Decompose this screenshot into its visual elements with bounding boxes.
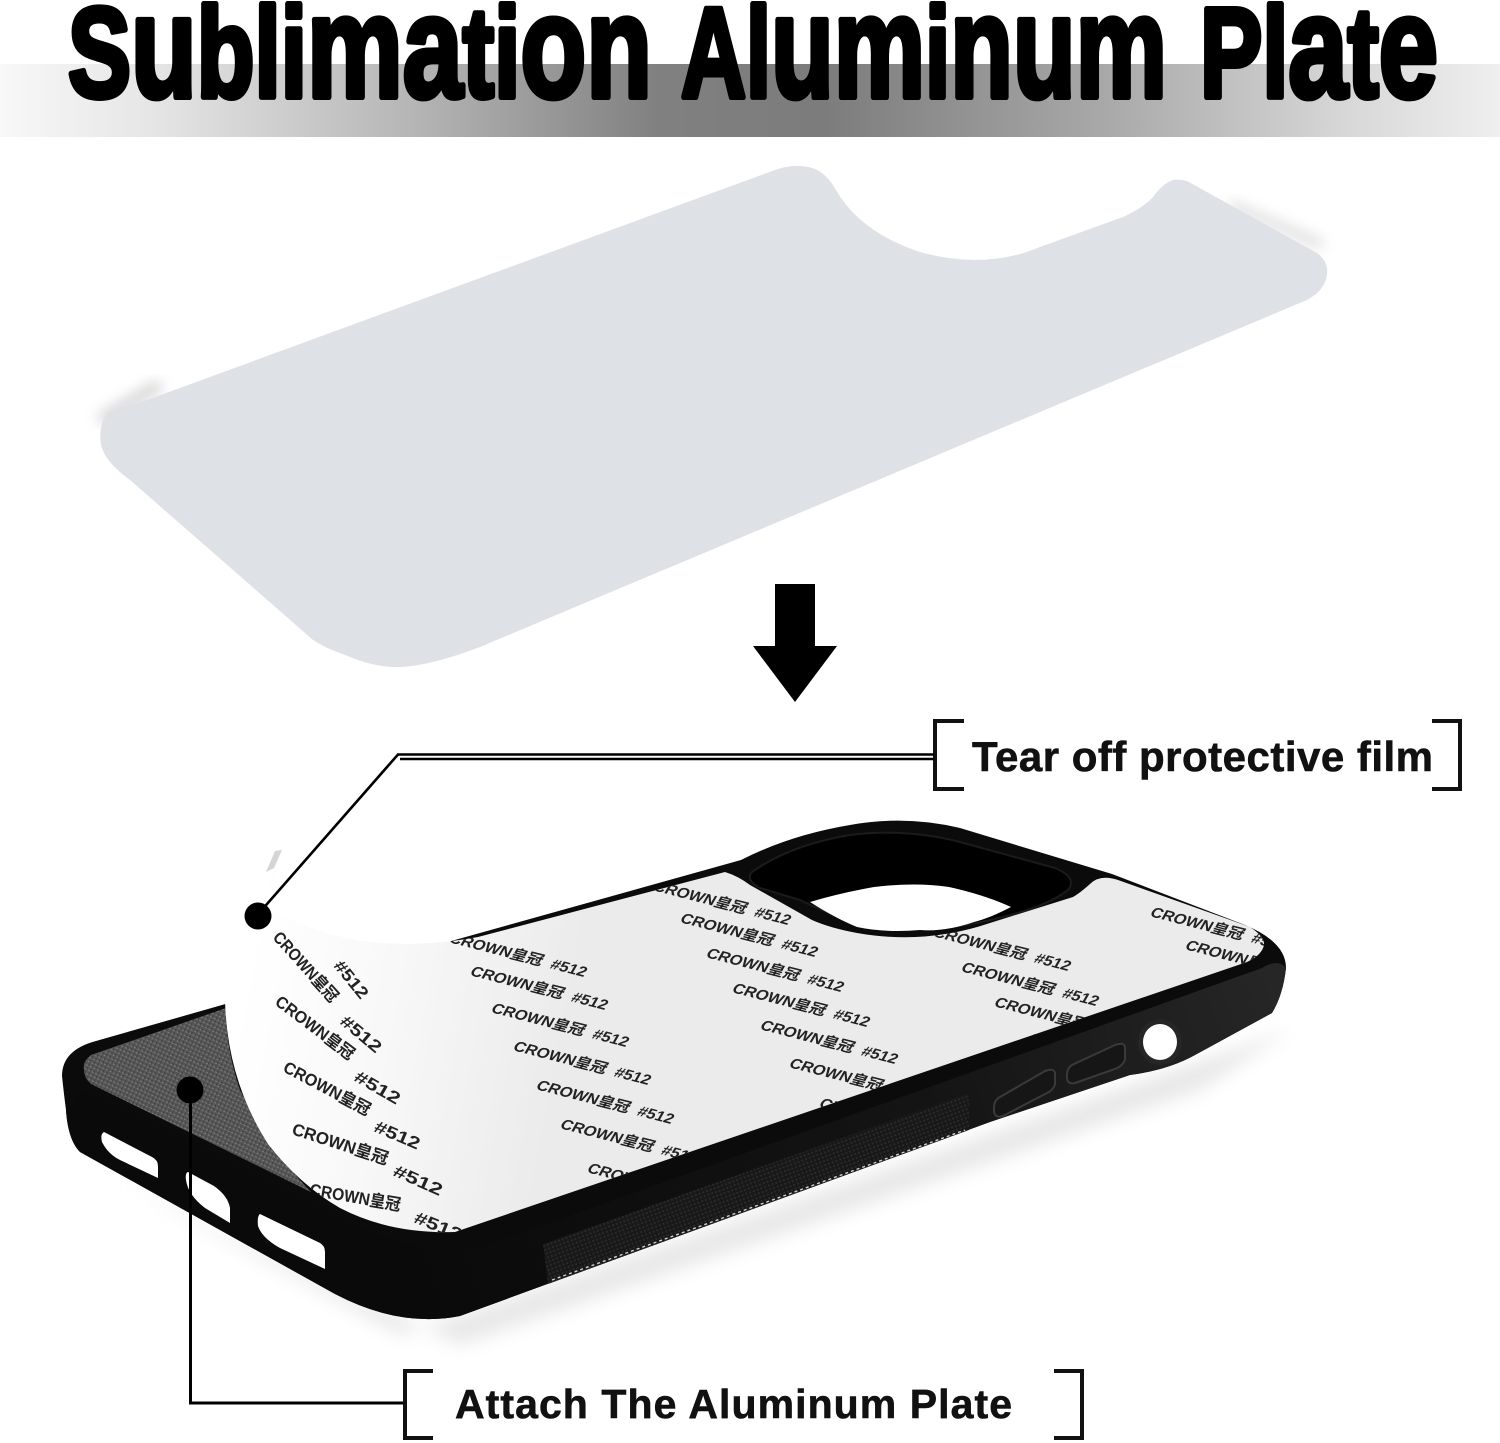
fabric backing xyxy=(84,1008,311,1192)
print: CROWN #512 rows: CROWN皇冠 #512 xyxy=(557,1116,702,1166)
port openings xyxy=(101,1132,325,1269)
print: CROWN #512 rows: CROWN皇冠 #512 xyxy=(1182,937,1327,987)
print: CROWN #512 rows: #512 xyxy=(351,1067,404,1108)
callout: tear off protective film xyxy=(935,721,1460,789)
aluminum plate xyxy=(100,166,1327,667)
phone shadow xyxy=(120,1030,1290,1345)
switch opening xyxy=(1138,1019,1182,1065)
print: CROWN #512 rows: CROWN皇冠 #512 xyxy=(816,1095,961,1145)
print: CROWN #512 rows xyxy=(274,885,1264,1232)
print: CROWN #512 rows: CROWN皇冠 #512 xyxy=(650,878,795,928)
print: CROWN #512 rows: #512 xyxy=(390,1161,446,1200)
print: CROWN #512 rows: CROWN皇冠 #512 xyxy=(757,1017,902,1067)
print: CROWN #512 rows: CROWN皇冠 xyxy=(317,1215,411,1250)
phone case xyxy=(62,821,1327,1345)
print: CROWN #512 rows: #512 xyxy=(330,957,372,1003)
print: CROWN #512 rows: CROWN皇冠 xyxy=(290,1120,391,1169)
print: CROWN #512 rows: #512 xyxy=(412,1208,465,1244)
print: CROWN #512 rows: CROWN皇冠 #512 xyxy=(1147,904,1292,954)
print: CROWN #512 rows: CROWN皇冠 #512 xyxy=(584,1160,729,1210)
arrow pointing down xyxy=(753,584,837,702)
print: CROWN #512 rows: CROWN皇冠 #512 xyxy=(467,963,612,1013)
leader line: tear off film xyxy=(244,754,934,930)
print: CROWN #512 rows: CROWN皇冠 #512 xyxy=(958,959,1103,1009)
print: CROWN #512 rows: CROWN皇冠 #512 xyxy=(446,930,591,980)
print: CROWN #512 rows: CROWN皇冠 #512 xyxy=(786,1055,931,1105)
protective film and print panel xyxy=(225,850,1327,1250)
print: CROWN #512 rows: CROWN皇冠 #512 xyxy=(677,910,822,960)
print: CROWN #512 rows: CROWN皇冠 xyxy=(272,992,358,1064)
case silhouette xyxy=(62,821,1286,1319)
print: CROWN #512 rows: CROWN皇冠 #512 xyxy=(488,1000,633,1050)
print: CROWN #512 rows: CROWN皇冠 #512 xyxy=(533,1077,678,1127)
plate edge shadow: top right xyxy=(1230,205,1322,245)
callout: attach the aluminum plate xyxy=(405,1371,1082,1438)
print: CROWN #512 rows: CROWN皇冠 #512 xyxy=(703,945,848,995)
camera opening xyxy=(750,833,1071,931)
print: CROWN #512 rows: CROWN皇冠 #512 xyxy=(729,980,874,1030)
plate edge shadow: top left xyxy=(100,385,160,420)
print: CROWN #512 rows: #512 xyxy=(371,1117,423,1153)
side face xyxy=(66,963,1286,1319)
title banner gradient xyxy=(0,64,1500,137)
textured grip xyxy=(543,1093,969,1284)
leader line: attach plate xyxy=(176,1076,404,1403)
side buttons xyxy=(994,1044,1125,1117)
print: CROWN #512 rows: CROWN皇冠 xyxy=(269,928,342,1006)
print: CROWN #512 rows: CROWN皇冠 xyxy=(280,1058,374,1120)
print: CROWN #512 rows: CROWN皇冠 xyxy=(308,1180,402,1215)
callout: attach the aluminum plate: Attach The Aluminum Plate xyxy=(455,1381,1012,1427)
print: CROWN #512 rows: CROWN皇冠 #512 xyxy=(930,924,1075,974)
print: CROWN #512 rows: #512 xyxy=(336,1012,385,1057)
title xyxy=(68,0,1438,128)
callout: tear off protective film: Tear off protective film xyxy=(972,733,1433,780)
print: CROWN #512 rows: CROWN皇冠 #512 xyxy=(991,994,1136,1044)
print: CROWN #512 rows: CROWN皇冠 #512 xyxy=(1025,1030,1170,1080)
print: CROWN #512 rows: CROWN皇冠 #512 xyxy=(510,1038,655,1088)
